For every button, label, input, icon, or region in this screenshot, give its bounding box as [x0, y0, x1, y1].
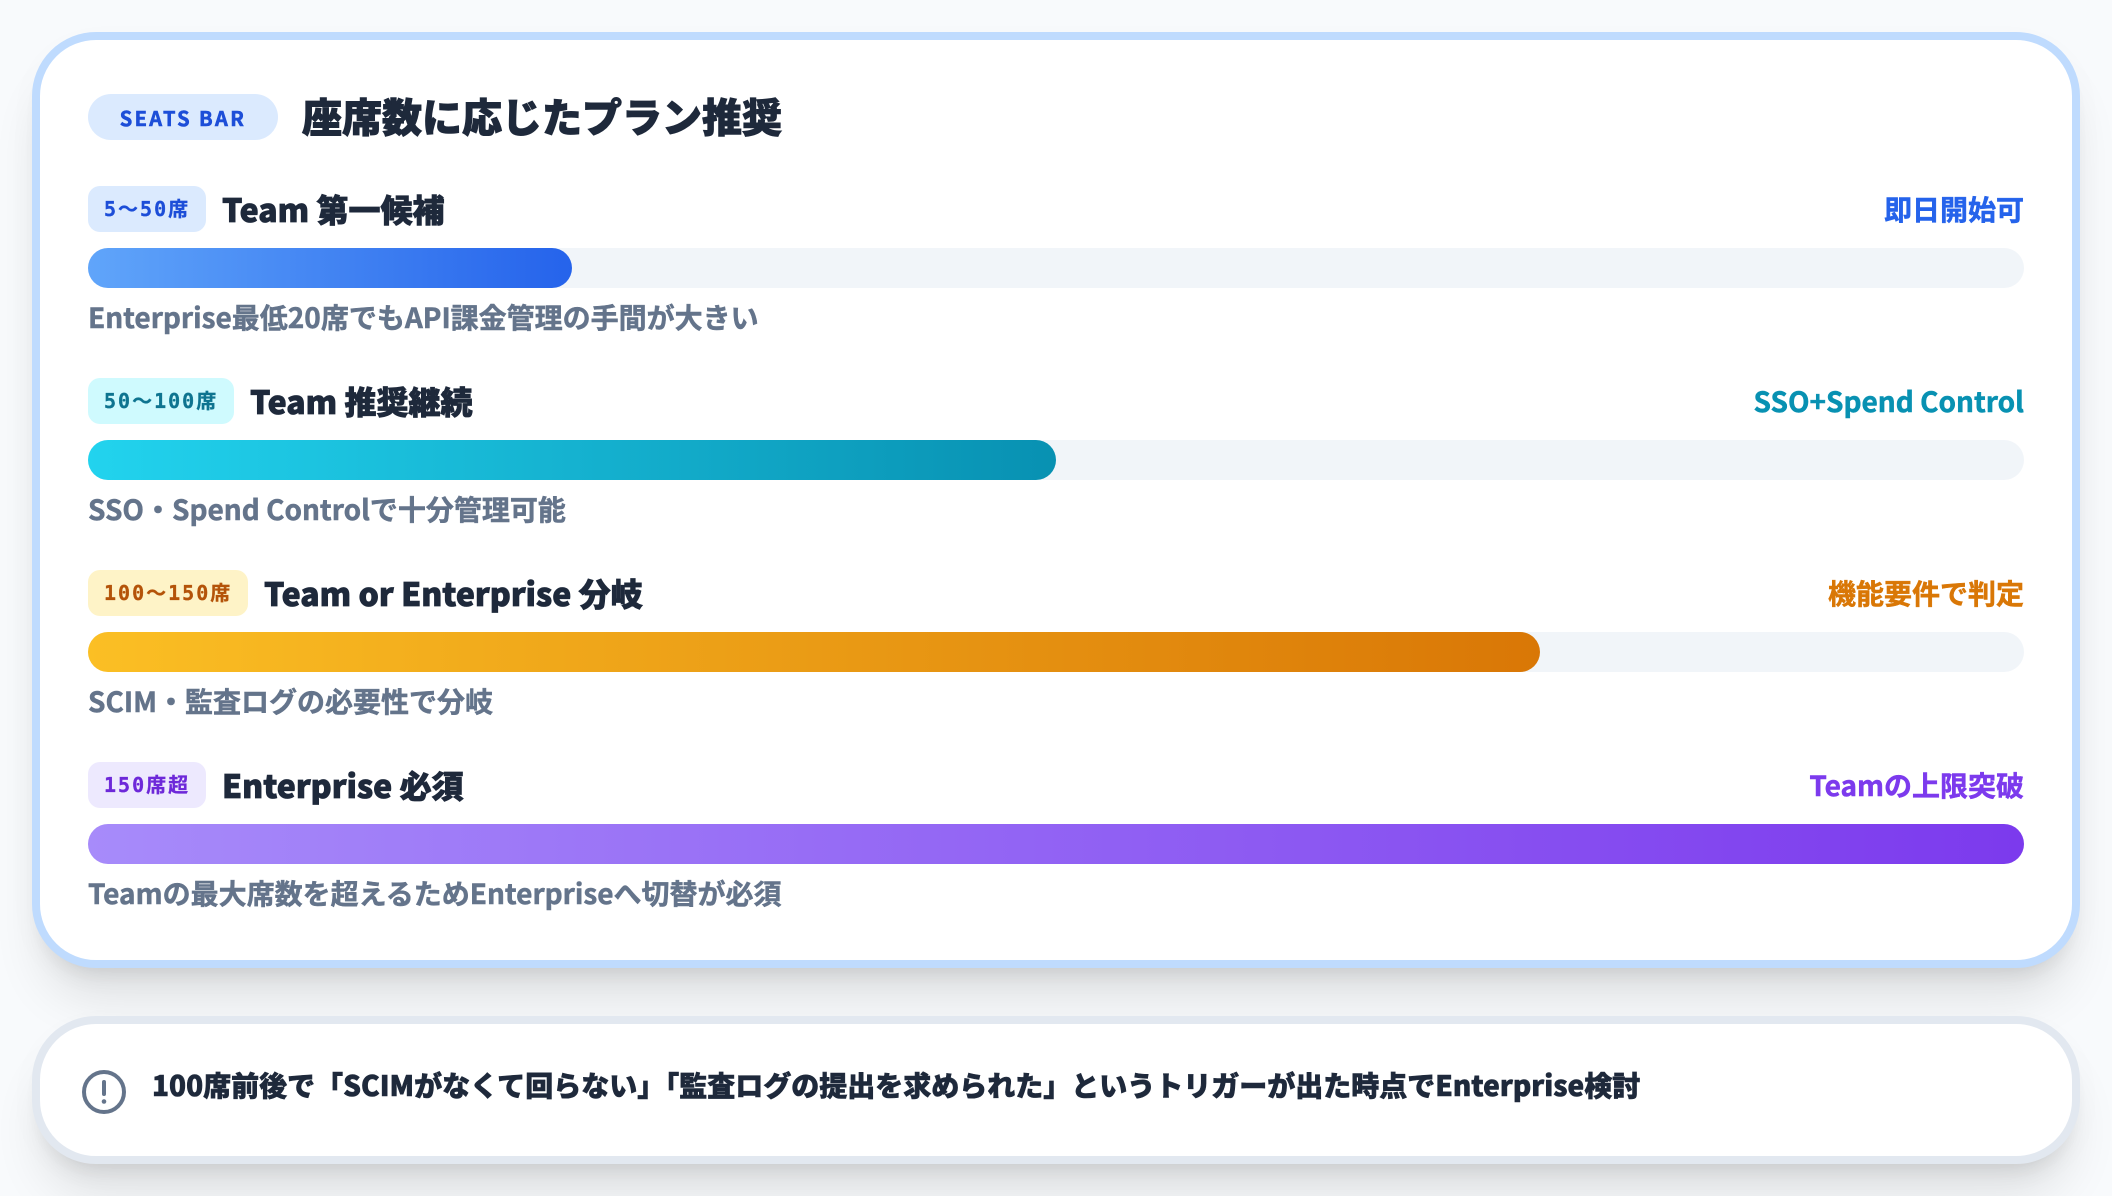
row: 150席超 — [88, 762, 2024, 913]
heading: 座席数に応じたプラン推奨 — [302, 86, 782, 144]
tag: seat range: 150席超 — [104, 773, 190, 797]
description: SSO・Spend Controlで十分管理可能 — [88, 489, 566, 529]
badge: SEATS BAR — [88, 94, 278, 140]
row: 5〜50席 — [88, 186, 2024, 337]
row note: 機能要件で判定 — [1828, 573, 2024, 613]
tag: seat range: 50〜100席 — [104, 389, 218, 413]
description: Enterprise最低20席でもAPI課金管理の手間が大きい — [88, 297, 759, 337]
row title: Team 第一候補 — [222, 186, 445, 232]
row: 50〜100席 — [88, 378, 2024, 529]
tag: seat range — [88, 186, 206, 232]
row title: Team 推奨継続 — [250, 378, 473, 424]
bar: 25% — [88, 248, 2024, 288]
bar: 100% — [88, 824, 2024, 864]
icon: alert circle — [82, 1070, 126, 1114]
row: 100〜150席 — [88, 570, 2024, 721]
tag: seat range: 100〜150席 — [104, 581, 232, 605]
row note: Teamの上限突破 — [1809, 765, 2024, 805]
callout text: 100席前後で「SCIMがなくて回らない」「監査ログの提出を求められた」というトリガーが出た時点でEnterprise検討 — [152, 1065, 1640, 1105]
panel: seats bar — [32, 32, 2080, 968]
description: SCIM・監査ログの必要性で分岐 — [88, 681, 493, 721]
description: Teamの最大席数を超えるためEnterpriseへ切替が必須 — [88, 873, 782, 913]
tag: seat range — [88, 378, 234, 424]
badge: SEATS BAR: SEATS BAR — [120, 103, 246, 132]
bar: 50% — [88, 440, 2024, 480]
tag: seat range: 5〜50席 — [104, 197, 190, 221]
row note: 即日開始可 — [1884, 189, 2024, 229]
row title: Team or Enterprise 分岐 — [264, 570, 643, 616]
tag: seat range — [88, 570, 248, 616]
row note: SSO+Spend Control — [1754, 381, 2024, 421]
row title: Enterprise 必須 — [222, 762, 464, 808]
bar: 75% — [88, 632, 2024, 672]
panel: trigger callout — [32, 1016, 2080, 1164]
tag: seat range — [88, 762, 206, 808]
